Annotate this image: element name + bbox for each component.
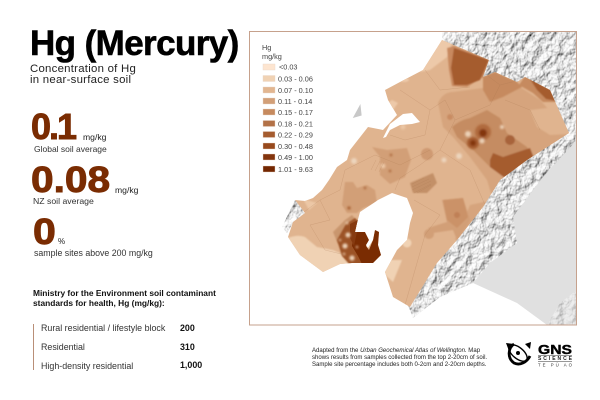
- logo: GNS Science: SCIENCE: [538, 356, 573, 362]
- subtitle: Concentration of Hg: [30, 63, 136, 75]
- logo: GNS Science: [506, 342, 573, 368]
- legend: [262, 43, 313, 174]
- Wellington hotspot: [333, 215, 382, 265]
- legend: 0.18 - 0.21: [278, 120, 313, 128]
- source note: Adapted from the Urban Geochemical Atlas of Wellington. Map: [312, 348, 480, 354]
- stat: sample sites above 200 mg/kg: %: [58, 237, 65, 246]
- stat: NZ soil average: NZ soil average: [33, 196, 94, 206]
- source note: [312, 348, 487, 368]
- soil mercury choropleth: [288, 40, 569, 307]
- legend: 0.07 - 0.10: [278, 86, 313, 95]
- legend: 0.11 - 0.14: [278, 97, 312, 106]
- stat: global soil average: [31, 106, 107, 154]
- standards table: 1,000: [180, 360, 202, 370]
- source note: shows results from samples collected from the top 2-20cm of soil.: [312, 354, 487, 360]
- standards table: [33, 324, 209, 370]
- stat: NZ soil average: mg/kg: [115, 185, 138, 195]
- legend: 1.01 - 9.63: [278, 165, 313, 174]
- map panel: [249, 31, 577, 366]
- hotspots: [347, 118, 504, 210]
- standards table: High-density residential: [41, 361, 133, 371]
- subtitle: in near-surface soil: [30, 74, 131, 86]
- logo: GNS Science: GNS: [538, 343, 572, 357]
- legend: Hg: [262, 43, 271, 52]
- roads and boundaries: [300, 70, 540, 305]
- title: Hg (Mercury): [30, 24, 239, 63]
- source note: Sample site percentage includes both 0-2cm and 2-20cm depths.: [312, 362, 486, 368]
- legend: <0.03: [279, 62, 297, 72]
- legend: 0.03 - 0.06: [278, 74, 313, 84]
- legend: 0.49 - 1.00: [278, 153, 313, 162]
- stat: sample sites above 200 mg/kg: [33, 211, 153, 258]
- legend: mg/kg: [262, 52, 282, 61]
- inlet: [383, 113, 420, 138]
- standards table: Residential: [41, 342, 85, 352]
- legend: 0.22 - 0.29: [278, 130, 313, 140]
- stat: sample sites above 200 mg/kg: sample sites above 200 mg/kg: [34, 248, 153, 258]
- logo: GNS Science: TE PŪ AO: [538, 362, 573, 368]
- standards heading: Ministry for the Environment soil contaminant: [33, 288, 216, 298]
- legend swatches: [263, 64, 275, 172]
- stat: NZ soil average: 0.08: [31, 159, 110, 200]
- standards table: Rural residential / lifestyle block: [41, 323, 165, 333]
- stat: global soil average: 0.1: [31, 106, 75, 147]
- stat: NZ soil average: [31, 159, 138, 206]
- standards table: 200: [180, 323, 195, 333]
- stat: sample sites above 200 mg/kg: 0: [33, 211, 56, 252]
- legend: 0.15 - 0.17: [278, 108, 313, 117]
- standards heading: standards for health, Hg (mg/kg):: [33, 298, 165, 308]
- icon: atom swirl: [506, 342, 531, 364]
- stat: global soil average: mg/kg: [83, 132, 106, 142]
- terrain hillshade: [280, 31, 577, 325]
- standards table: 310: [180, 342, 195, 352]
- standards heading: [33, 288, 216, 308]
- legend: 0.30 - 0.48: [278, 142, 313, 151]
- stat: global soil average: Global soil average: [34, 144, 107, 154]
- subtitle: [30, 63, 136, 86]
- map frame: [250, 32, 576, 325]
